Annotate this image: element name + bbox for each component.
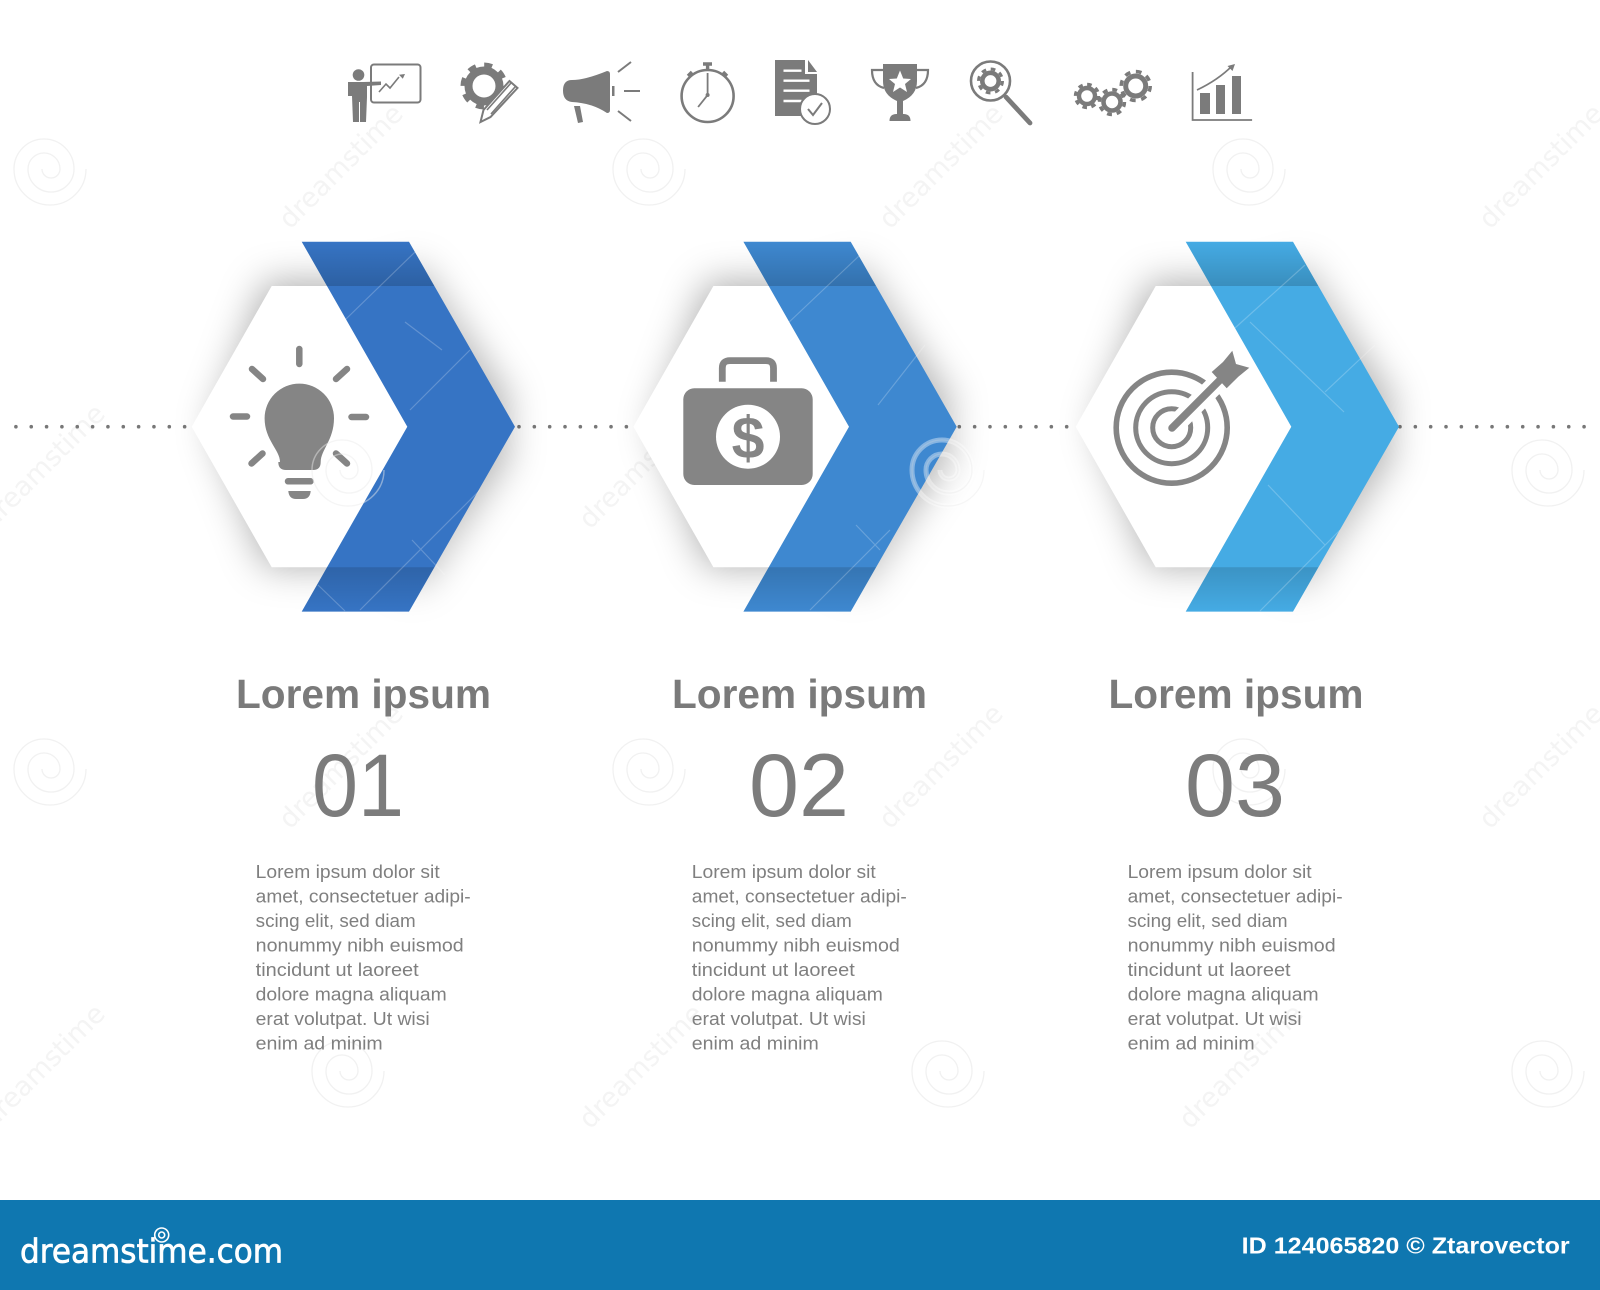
watermark text background: dreamstime	[873, 98, 1010, 235]
icon: gear and pencil	[463, 65, 518, 122]
paragraph 1: enim ad minim	[256, 1032, 383, 1054]
chevron: step 3	[1186, 242, 1399, 612]
icon: briefcase with dollar	[683, 361, 813, 485]
step 3 graphic	[1076, 242, 1399, 612]
paragraph 2: erat volutpat. Ut wisi	[692, 1008, 866, 1029]
paragraph 3: amet, consectetuer adipi-	[1128, 886, 1343, 906]
watermark text background: dreamstime	[273, 698, 410, 835]
paragraph 3: nonummy nibh euismod	[1128, 934, 1336, 956]
icon: magnifier with gear	[971, 62, 1030, 123]
dotted connector line	[16, 425, 1585, 429]
chevron: step 2	[743, 242, 957, 612]
number 01: 01	[312, 735, 404, 835]
footer logo text: dreamstime.com	[20, 1232, 283, 1271]
paragraph 2: Lorem ipsum dolor sit	[692, 861, 876, 882]
paragraph 3: scing elit, sed diam	[1128, 910, 1288, 931]
heading 3: Lorem ipsum	[1108, 671, 1364, 717]
step 1 graphic	[192, 242, 515, 612]
paragraph 3: Lorem ipsum dolor sit	[1128, 861, 1312, 882]
paragraph 3: dolore magna aliquam	[1128, 984, 1319, 1004]
paragraph 3: erat volutpat. Ut wisi	[1128, 1008, 1302, 1029]
paragraph 3: enim ad minim	[1128, 1032, 1255, 1054]
watermark text background: dreamstime	[573, 398, 710, 535]
hexagon: step 1	[192, 286, 480, 567]
heading 1: Lorem ipsum	[236, 671, 491, 717]
footer credit: ID 124065820 © Ztarovector	[1242, 1232, 1570, 1258]
step 2 graphic	[633, 242, 957, 612]
hexagon: step 2	[633, 286, 922, 567]
number 03: 03	[1185, 735, 1285, 835]
paragraph 3: tincidunt ut laoreet	[1128, 959, 1291, 980]
watermark text background: dreamstime	[873, 698, 1010, 835]
column 3 text	[1108, 671, 1364, 1054]
number 02: 02	[749, 735, 849, 835]
icon: three gears	[1076, 72, 1150, 114]
icon: stopwatch	[682, 64, 734, 122]
icon: rising bar chart	[1193, 64, 1252, 120]
shadow: step 1	[212, 268, 511, 585]
watermark text background: dreamstime	[573, 998, 710, 1135]
watermark text background: dreamstime	[1173, 398, 1310, 535]
top icon row	[348, 60, 1252, 124]
chevron: step 1	[302, 242, 515, 612]
hexagon: step 3	[1076, 286, 1364, 567]
icon: document with check	[775, 60, 830, 124]
paragraph 1: amet, consectetuer adipi-	[256, 886, 471, 906]
icon: trophy	[872, 64, 928, 121]
icon: target with arrow	[1116, 351, 1249, 483]
shadow: step 3	[1096, 268, 1395, 585]
footer bar	[0, 1200, 1600, 1290]
paragraph 1: nonummy nibh euismod	[256, 934, 464, 956]
watermark highlight on chevrons	[312, 252, 1375, 611]
column 1 text	[236, 671, 491, 1054]
icon: megaphone	[563, 62, 640, 123]
footer logo spiral	[155, 1228, 169, 1242]
shadow: step 2	[654, 268, 953, 585]
paragraph 1: dolore magna aliquam	[256, 984, 447, 1004]
paragraph 1: Lorem ipsum dolor sit	[256, 861, 440, 882]
column 2 text	[672, 671, 927, 1054]
heading 2: Lorem ipsum	[672, 671, 927, 717]
watermark spirals	[14, 139, 1584, 1107]
paragraph 2: dolore magna aliquam	[692, 984, 883, 1004]
paragraph 1: tincidunt ut laoreet	[256, 959, 419, 980]
paragraph 2: scing elit, sed diam	[692, 910, 852, 931]
paragraph 2: amet, consectetuer adipi-	[692, 886, 907, 906]
icon: light bulb	[233, 349, 366, 499]
paragraph 2: nonummy nibh euismod	[692, 934, 900, 956]
watermark text background: dreamstime	[273, 98, 410, 235]
icon: briefcase with dollar: $	[732, 405, 764, 471]
paragraph 2: tincidunt ut laoreet	[692, 959, 855, 980]
paragraph 2: enim ad minim	[692, 1032, 819, 1054]
paragraph 1: scing elit, sed diam	[256, 910, 416, 931]
watermark text background: dreamstime	[1173, 998, 1310, 1135]
paragraph 1: erat volutpat. Ut wisi	[256, 1008, 430, 1029]
icon: presenter with chart	[348, 64, 420, 122]
